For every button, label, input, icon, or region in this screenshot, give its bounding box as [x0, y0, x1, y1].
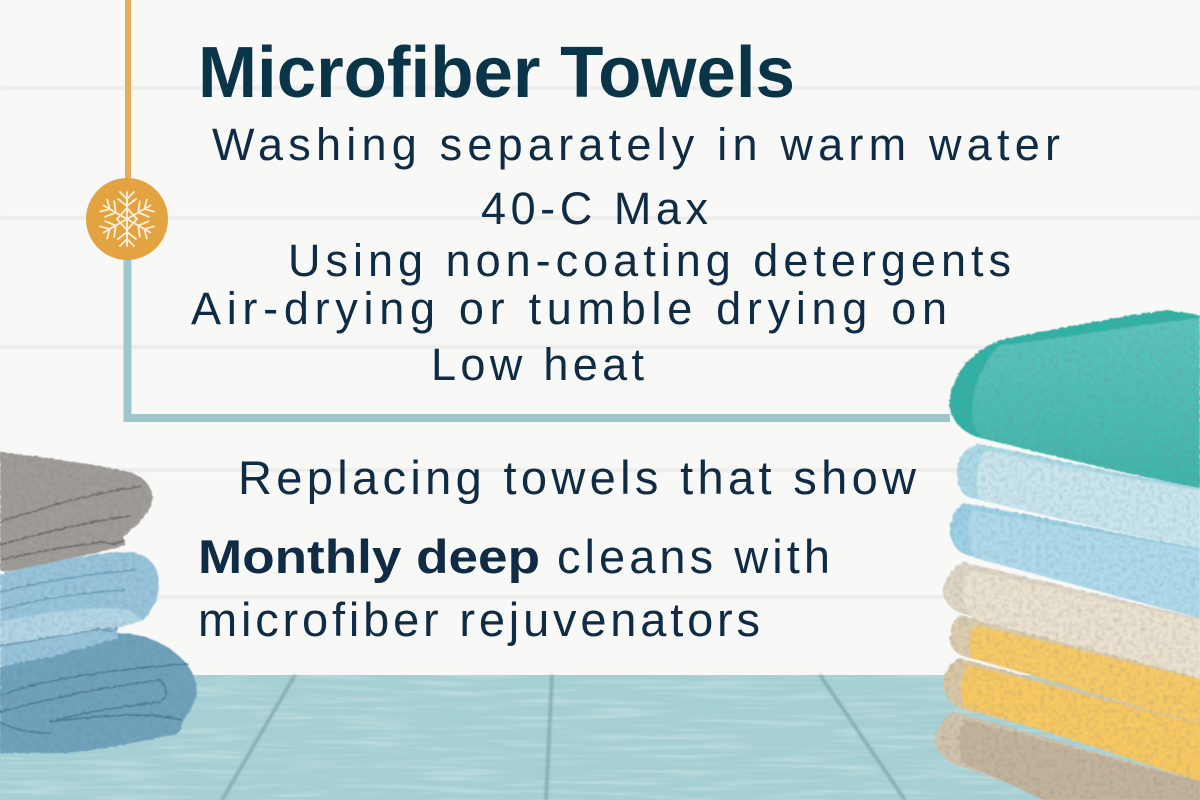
- line: cleans with: cleans with: [557, 530, 830, 583]
- line: rejuvenators: microfiber rejuvenators: [198, 593, 760, 646]
- text block: replacing towels: Replacing towels that show: [238, 451, 917, 504]
- towel: teal: [950, 310, 1200, 488]
- towel: taupe: [935, 712, 1200, 800]
- towel: light blue: [0, 552, 159, 666]
- towel: yellow upper: [950, 615, 1200, 723]
- left towel stack: [0, 452, 197, 753]
- line: temperature: 40-C Max: [481, 183, 708, 234]
- towel: sky blue: [950, 503, 1200, 618]
- line: low heat: Low heat: [431, 339, 644, 390]
- line: washing: Washing separately in warm water: [212, 119, 1060, 170]
- towel: dark blue: [0, 633, 197, 753]
- floor: teal wooden boards: [0, 675, 1200, 800]
- line: drying: Air-drying or tumble drying on: [191, 283, 947, 334]
- text block: monthly deep cleans: [198, 530, 830, 646]
- right towel stack: [935, 310, 1200, 800]
- towel: beige: [943, 562, 1200, 678]
- towel: pale blue: [957, 444, 1200, 549]
- icon: snowflake badge: [86, 178, 168, 260]
- line: detergents: Using non-coating detergents: [288, 235, 1011, 286]
- text block: care instructions: [191, 119, 1060, 390]
- title: Microfiber Towels: [198, 33, 795, 113]
- towel: grey: [0, 452, 152, 572]
- timeline connector with snowflake badge: [86, 0, 950, 418]
- towel: yellow lower: [943, 658, 1200, 781]
- bold lead-in: Monthly deep: [198, 530, 540, 583]
